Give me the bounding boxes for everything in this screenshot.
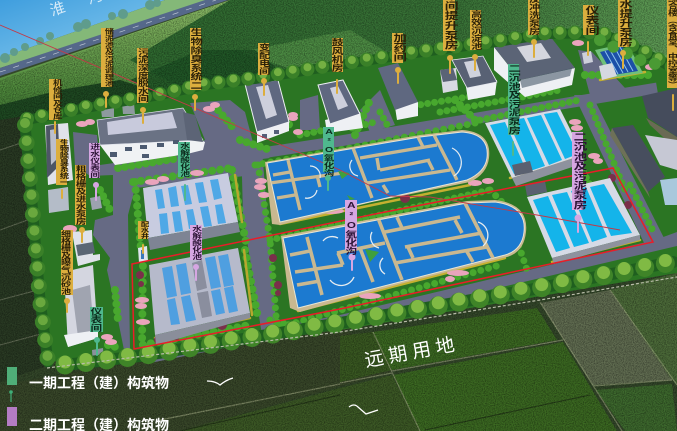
landscaping: hedges and blossom trees <box>100 72 655 348</box>
site lawn <box>27 30 677 362</box>
A2O oxidation ditch lower <box>281 200 526 312</box>
label: 加药间: 加药间 <box>390 33 406 62</box>
main building <box>97 99 205 165</box>
label: 粗格栅及进水泵房: 粗格栅及进水泵房 <box>75 165 87 225</box>
silos <box>100 99 114 117</box>
road beside river <box>0 0 228 76</box>
label: 高效沉淀池: 高效沉淀池 <box>470 10 482 50</box>
building: right pool pump station <box>582 43 643 80</box>
building: chemical dosing <box>378 63 418 120</box>
building: backwash pump house <box>494 36 575 97</box>
future land label: 远期用地 <box>363 333 461 372</box>
label: 水提升泵房: 水提升泵房 <box>616 0 632 46</box>
phase-two boundary line <box>132 168 653 349</box>
building: transformer room <box>245 80 289 143</box>
aeration triangle <box>365 249 379 262</box>
label: A2O氧化沟 purple: A²O氧化沟 <box>344 200 358 255</box>
label: 二沉池及污泥泵房 purple: 二沉池及污泥泵房 <box>570 132 586 210</box>
secondary clarifier 2 <box>525 178 640 264</box>
legend: phase one: 一期工程（建）构筑物 <box>29 375 169 391</box>
label: 变配电间: 变配电间 <box>258 43 270 75</box>
label: 细格栅及曝气沉砂池: 细格栅及曝气沉砂池 <box>61 230 73 295</box>
thin red line <box>0 25 620 230</box>
label: 鼓风机房: 鼓风机房 <box>331 38 345 72</box>
aeration triangle <box>338 171 350 179</box>
label: A2O氧化沟 green: A²O氧化沟 <box>323 127 335 176</box>
roads <box>73 50 677 363</box>
building: high-efficiency sedimentation <box>440 56 497 100</box>
label: 储泥池及污泥调理池: 储泥池及污泥调理池 <box>103 28 112 86</box>
building: blower room <box>318 80 363 133</box>
label: 二沉池及污泥泵房 green: 二沉池及污泥泵房 <box>507 64 521 134</box>
legend swatches <box>7 367 17 426</box>
pointer stems <box>55 40 673 355</box>
label: 生物除臭系统一: 生物除臭系统一 <box>58 139 68 185</box>
birds <box>207 378 378 414</box>
building: office complex east <box>610 88 677 205</box>
label: 污泥深度脱水间: 污泥深度脱水间 <box>137 48 149 103</box>
secondary clarifier 1 <box>485 109 584 186</box>
label: 水解酸化池 purple: 水解酸化池 <box>191 225 201 260</box>
tree rows <box>25 30 677 365</box>
label: 机修间及仓库: 机修间及仓库 <box>51 79 61 120</box>
river <box>0 0 165 58</box>
label: 生物除臭系统二: 生物除臭系统二 <box>189 28 203 90</box>
label: 加药间 <box>392 33 403 63</box>
building: left deodorization <box>45 123 102 213</box>
label: 进水仪表间: 进水仪表间 <box>90 143 99 178</box>
building: fine screen and grit chamber <box>64 230 148 365</box>
label: 仪表间 green: 仪表间 <box>90 307 104 332</box>
label: 配水井: 配水井 <box>139 221 147 239</box>
label: 水解酸化池 green: 水解酸化池 <box>179 142 189 177</box>
label: 仪表间: 仪表间 <box>582 5 597 35</box>
hydrolysis acidification tank 2 <box>149 248 250 345</box>
hydrolysis acidification tank 1 <box>143 173 240 250</box>
A2O oxidation ditch upper <box>265 130 489 225</box>
